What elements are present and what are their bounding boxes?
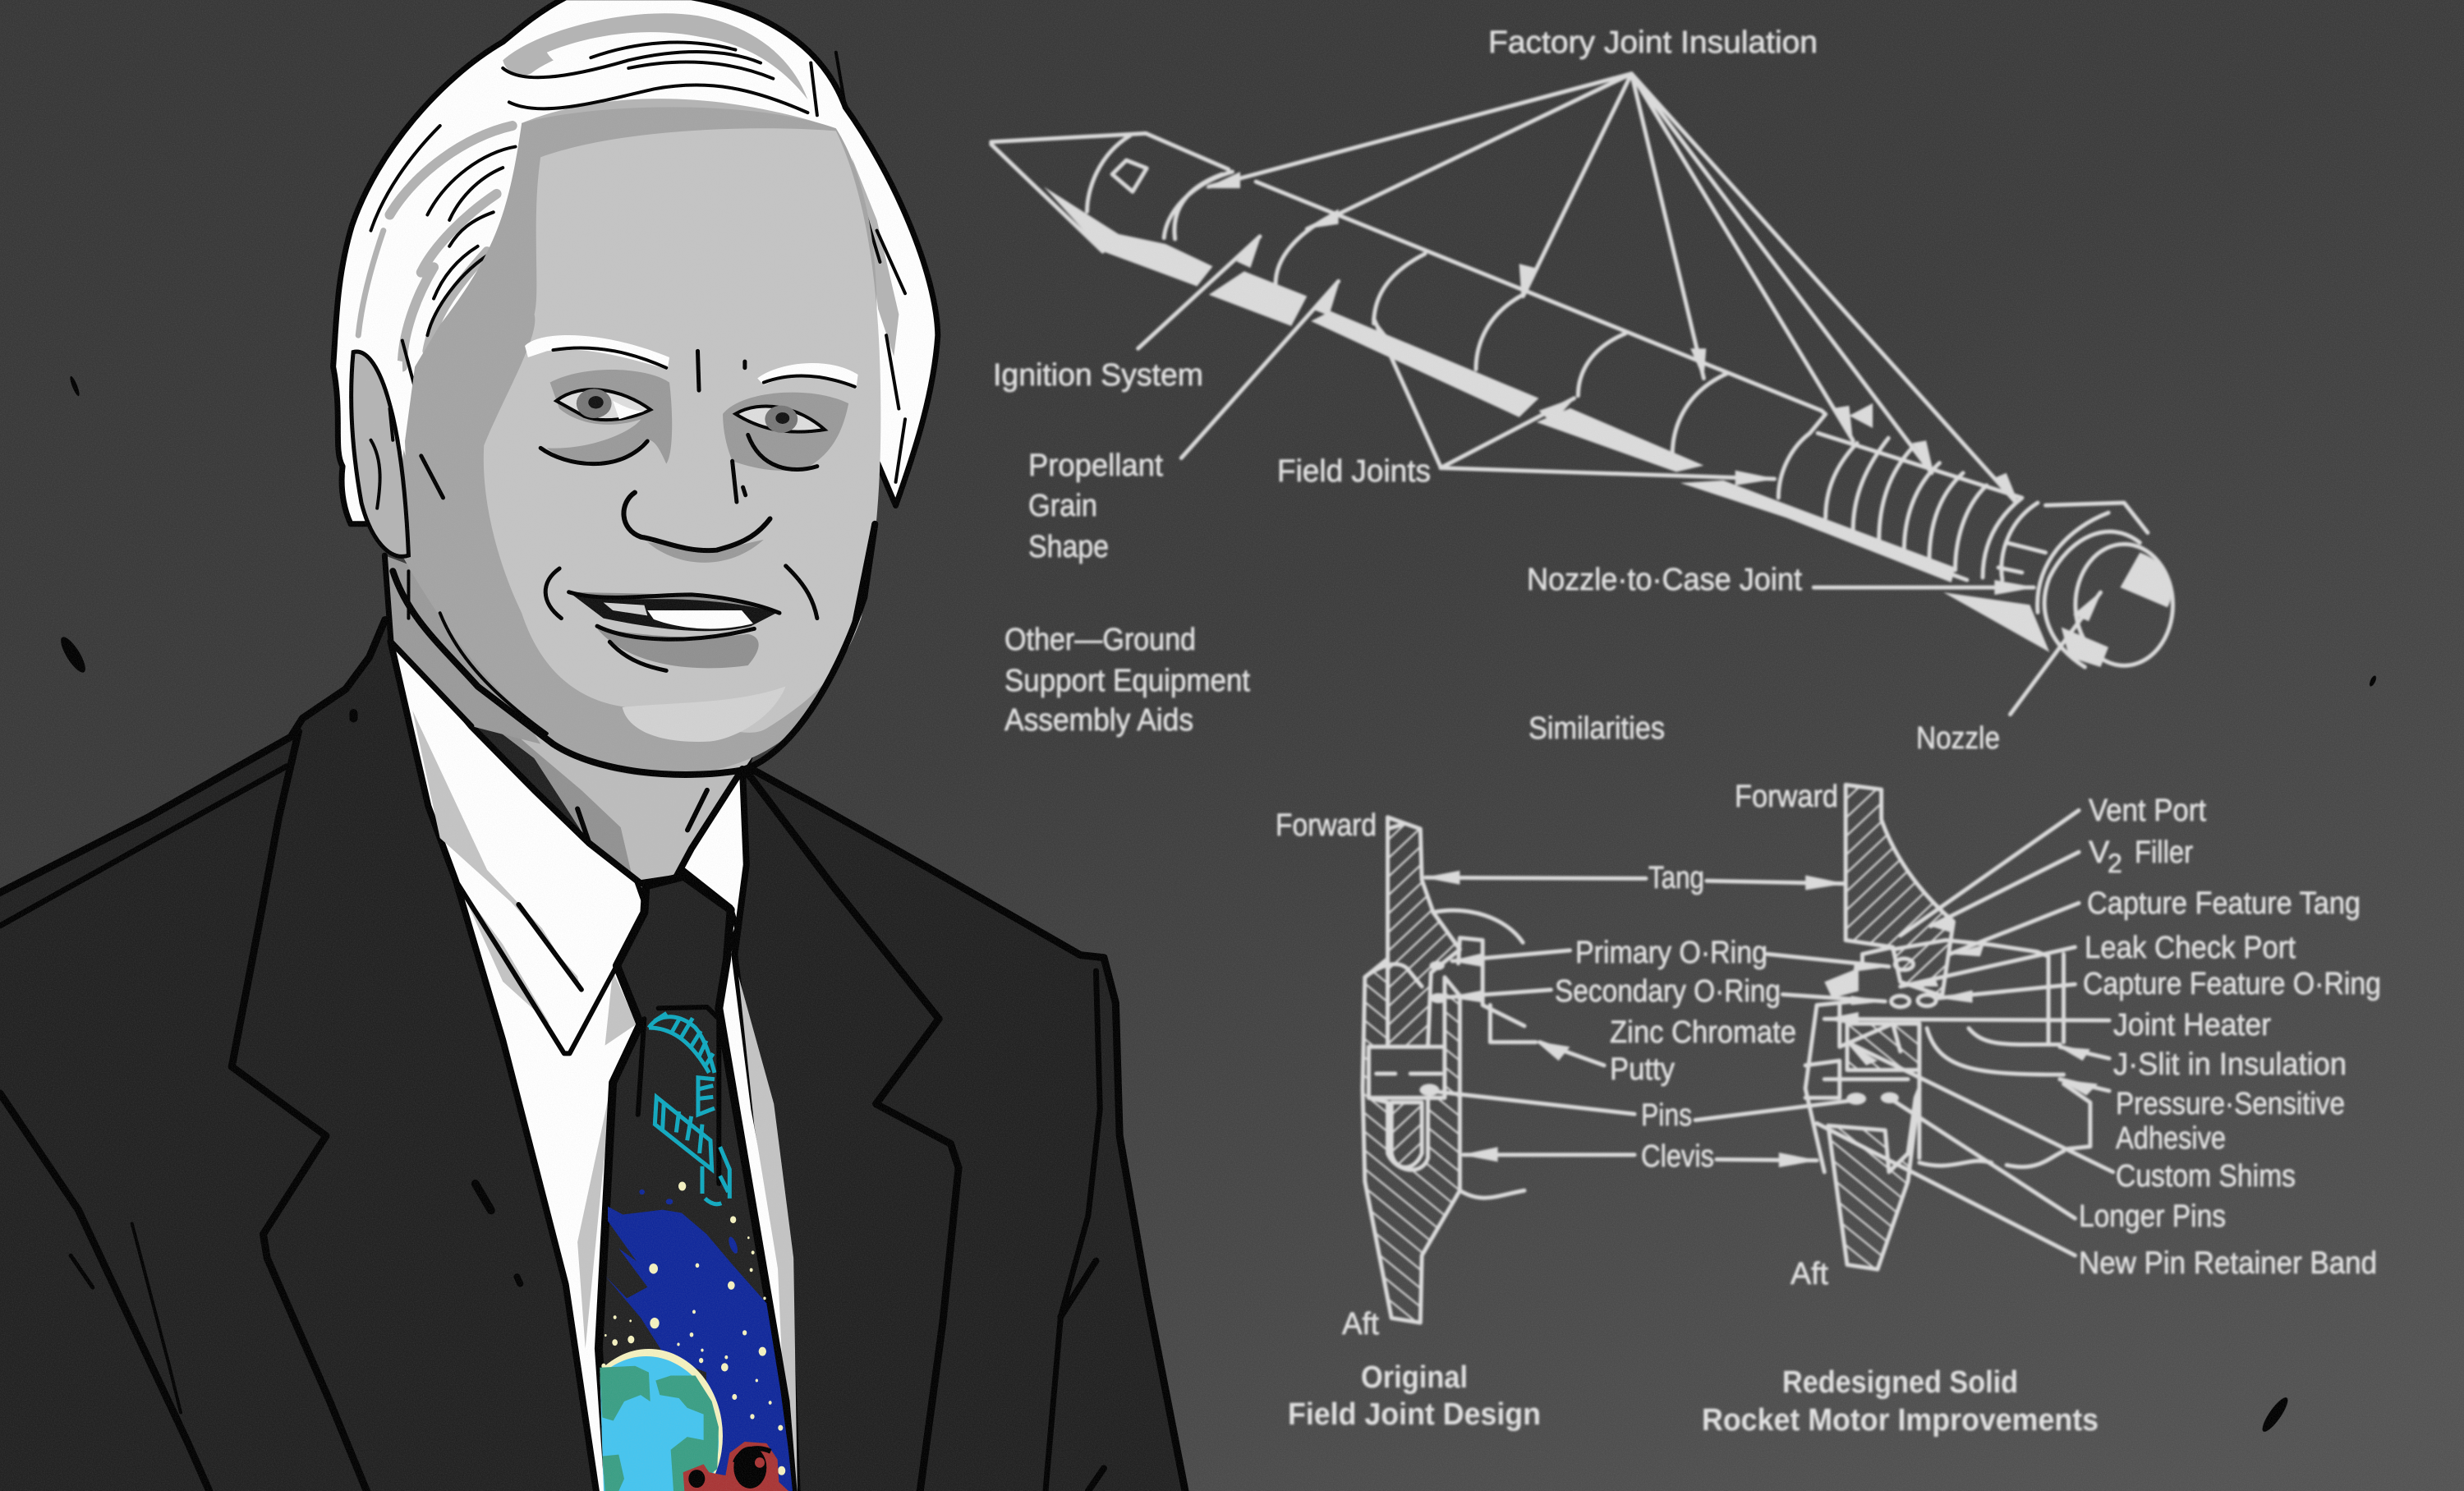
joint labels: Putty <box>1610 1052 1675 1087</box>
nose <box>623 493 770 550</box>
rocket body <box>991 133 2173 667</box>
jaw outline <box>393 524 875 775</box>
joint labels: Field Joint Design <box>1288 1397 1541 1432</box>
portrait: head <box>333 0 938 776</box>
joint labels: Zinc Chromate <box>1610 1015 1796 1050</box>
joint labels: Longer Pins <box>2079 1199 2226 1234</box>
field joint cross-section diagrams <box>1363 785 2113 1323</box>
face base <box>402 107 880 776</box>
joint labels: V <box>2089 835 2110 870</box>
face creases <box>421 351 874 634</box>
suit jacket <box>0 620 1186 1491</box>
joint labels: Pressure·Sensitive <box>2116 1087 2345 1121</box>
face highlight <box>484 128 880 733</box>
rocket labels: Other—Ground <box>1004 623 1196 657</box>
stars <box>601 1181 785 1475</box>
joint labels: Primary O·Ring <box>1575 936 1768 970</box>
shirt shading <box>412 711 798 1491</box>
joint labels: 2 <box>2108 849 2122 878</box>
back of neck <box>384 555 540 744</box>
joint labels: Clevis <box>1641 1139 1714 1174</box>
joint labels: Vent Port <box>2089 794 2206 828</box>
joint labels: Secondary O·Ring <box>1555 974 1781 1009</box>
neck shading <box>389 636 632 878</box>
rocket labels: Assembly Aids <box>1004 703 1193 738</box>
joint labels <box>1276 780 2381 1438</box>
rocket labels: Grain <box>1028 489 1097 523</box>
joint labels: Joint Heater <box>2113 1008 2271 1042</box>
rocket labels: Propellant <box>1028 449 1163 483</box>
arrows: field joints <box>1374 319 1777 485</box>
ink specks <box>57 375 2378 1434</box>
eyes <box>556 389 825 433</box>
eye sockets shading <box>547 370 672 463</box>
chin highlight <box>623 687 786 742</box>
joint labels: Leak Check Port <box>2085 931 2296 965</box>
eyebrows <box>525 335 858 389</box>
joint labels: Aft <box>1342 1307 1379 1341</box>
neck <box>389 636 833 883</box>
ear <box>352 352 408 556</box>
arrows: nozzle <box>1814 580 2102 715</box>
joint labels: Tang <box>1648 861 1704 895</box>
rocket labels: Shape <box>1028 530 1109 564</box>
back of neck outline <box>384 555 471 726</box>
rocket labels: Field Joints <box>1277 454 1431 489</box>
rocket cutaway diagram <box>991 25 2381 1438</box>
rocket labels: Support Equipment <box>1004 664 1250 698</box>
redesigned joint section <box>1805 785 2090 1269</box>
rocket labels: Nozzle·to·Case Joint <box>1527 563 1802 597</box>
joint labels: Pins <box>1641 1098 1692 1133</box>
shirt <box>390 642 798 1491</box>
collar <box>456 790 737 1053</box>
rocket labels: Factory Joint Insulation <box>1488 25 1818 60</box>
joint labels: Capture Feature O·Ring <box>2083 967 2381 1001</box>
nose shading <box>647 540 764 563</box>
portrait: suit, shirt and tie <box>0 620 1186 1491</box>
leader lines and arrows <box>1423 810 2113 1255</box>
joint labels: Custom Shims <box>2116 1159 2296 1194</box>
hair silhouette <box>333 0 938 524</box>
joint labels: Forward <box>1276 808 1377 843</box>
arrows: ignition and propellant <box>1138 235 1340 458</box>
mouth <box>569 592 779 670</box>
joint labels: Forward <box>1735 780 1838 814</box>
joint labels: Original <box>1361 1360 1468 1395</box>
joint labels: Rocket Motor Improvements <box>1702 1403 2099 1438</box>
satellite <box>649 1013 729 1204</box>
rocket labels <box>993 25 2000 756</box>
jaw crease <box>408 571 547 734</box>
tie <box>599 877 793 1491</box>
joint labels: Adhesive <box>2116 1121 2226 1156</box>
joint labels: Aft <box>1791 1257 1828 1291</box>
hair shading <box>358 13 899 366</box>
joint labels: New Pin Retainer Band <box>2079 1246 2377 1281</box>
astronaut <box>683 1442 788 1491</box>
blue nebula <box>605 1207 794 1491</box>
original joint section <box>1363 817 1536 1323</box>
hair strands <box>371 43 905 482</box>
joint labels: J·Slit in Insulation <box>2113 1047 2347 1082</box>
earth <box>600 1349 723 1491</box>
tie knot crease <box>638 1007 719 1184</box>
suit line work <box>0 713 1104 1491</box>
rocket labels: Similarities <box>1529 711 1665 746</box>
rocket labels: Nozzle <box>1916 721 2000 756</box>
joint labels: Capture Feature Tang <box>2087 886 2361 921</box>
arrows: factory joint insulation <box>1205 74 2018 502</box>
tie artwork <box>600 1011 793 1491</box>
joint labels: Filler <box>2135 835 2193 870</box>
rocket labels: Ignition System <box>993 358 1203 393</box>
joint labels: Redesigned Solid <box>1782 1365 2018 1400</box>
